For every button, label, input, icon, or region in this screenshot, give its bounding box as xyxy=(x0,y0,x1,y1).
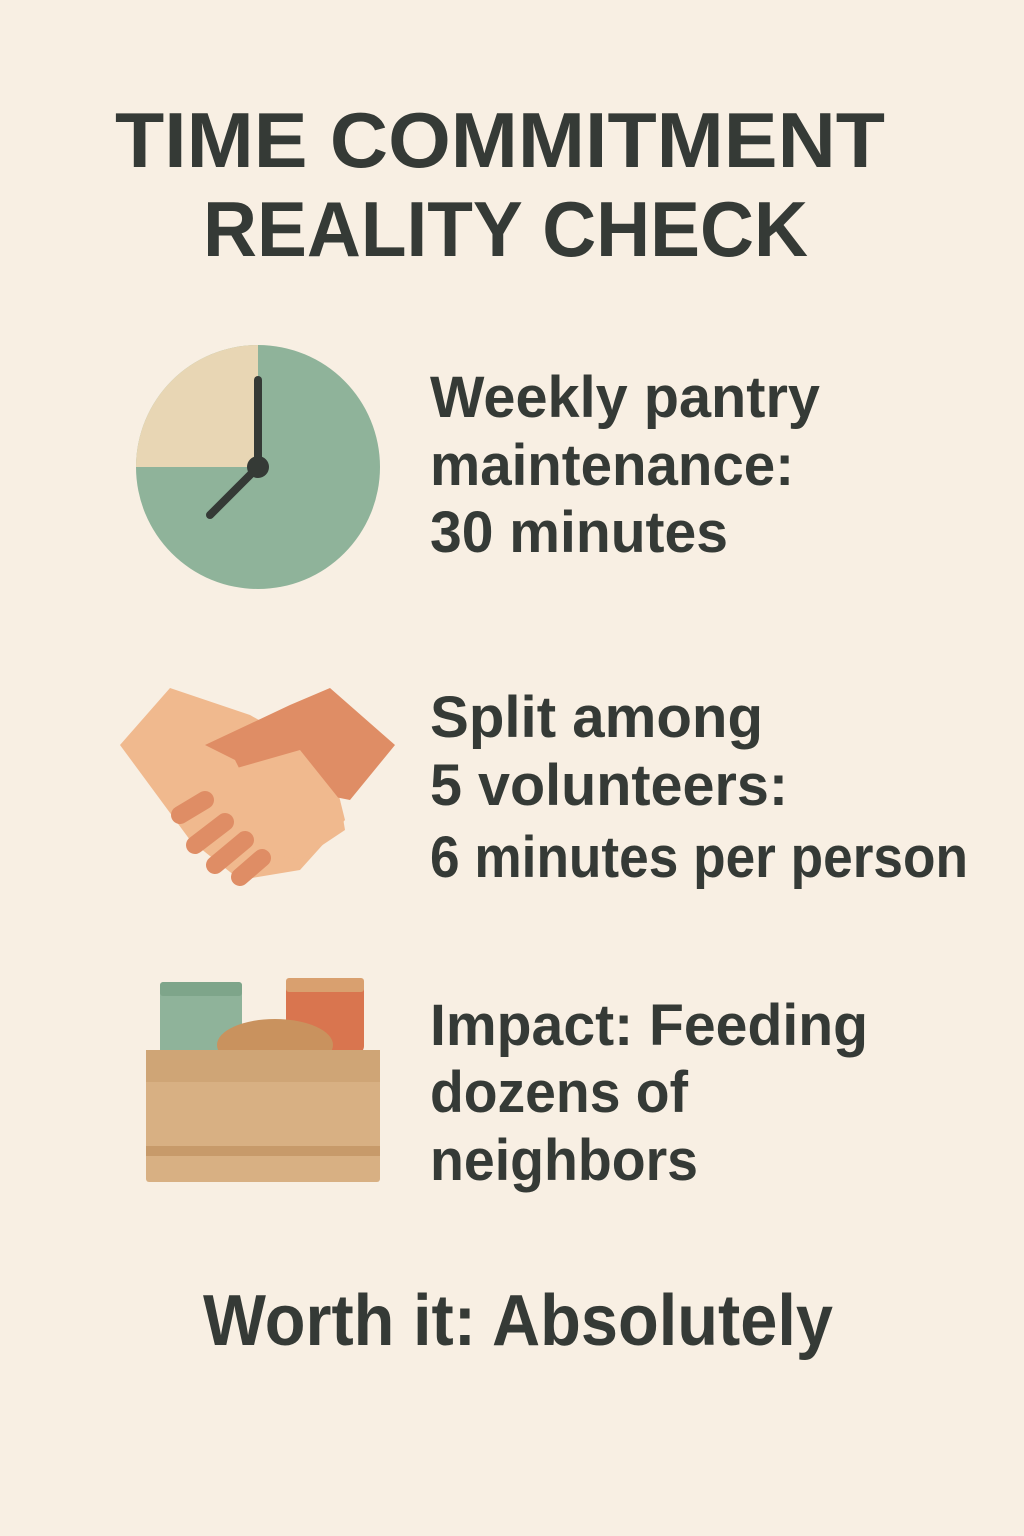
title xyxy=(115,96,885,273)
text: weekly maintenance xyxy=(430,365,820,565)
text: impact xyxy=(430,993,868,1193)
title: REALITY CHECK xyxy=(203,185,808,273)
text: split among volunteers xyxy=(430,685,968,890)
icon: food crate xyxy=(146,978,380,1182)
text: impact: Impact: Feeding xyxy=(430,993,868,1058)
conclusion: Worth it: Absolutely xyxy=(203,1281,833,1361)
title: TIME COMMITMENT xyxy=(115,96,885,184)
icon: clock xyxy=(136,345,380,589)
icon: handshake xyxy=(120,688,395,880)
text: split among volunteers: 6 minutes per person xyxy=(430,825,968,890)
text: impact: dozens of xyxy=(430,1060,689,1125)
text: weekly maintenance: 30 minutes xyxy=(430,500,728,565)
text: split among volunteers: Split among xyxy=(430,685,763,750)
text: split among volunteers: 5 volunteers: xyxy=(430,753,788,818)
text: impact: neighbors xyxy=(430,1128,698,1193)
text: weekly maintenance: Weekly pantry xyxy=(430,365,820,430)
text: weekly maintenance: maintenance: xyxy=(430,433,794,498)
